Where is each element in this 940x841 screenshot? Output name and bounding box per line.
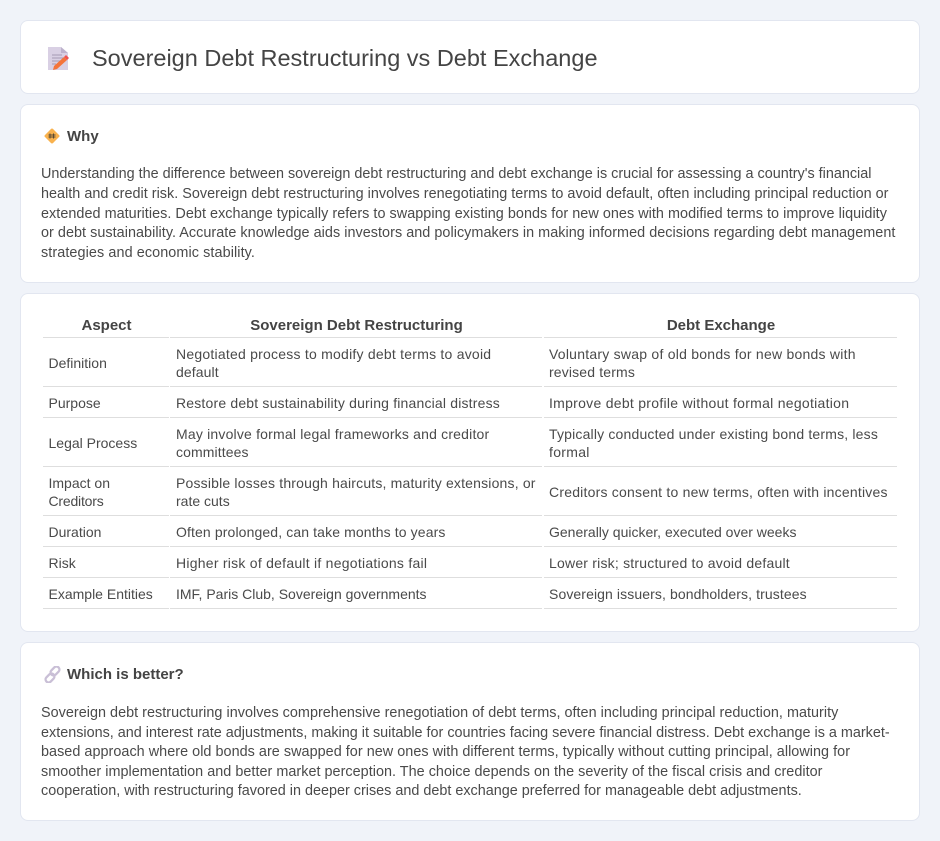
why paragraph: or debt sustainability. Accurate knowledge aids investors and policymakers in making informed decisions regarding debt management [41, 225, 895, 241]
row: legal process: Legal Process [48, 435, 137, 451]
which is better paragraph: extensions, and interest rate adjustments, making it suitable for countries facing severe financial distress. Debt exchange is a market- [41, 725, 890, 741]
why paragraph: health and credit risk. Sovereign debt restructuring involves renegotiating terms to avoid default, often including principal reduction or [41, 186, 888, 202]
icon: warning diamond [44, 128, 60, 144]
row: definition: Voluntary swap of old bonds for new bonds with [549, 346, 856, 362]
row: impact on creditors [48, 475, 888, 509]
row: definition: revised terms [549, 364, 635, 380]
why paragraph: Understanding the difference between sovereign debt restructuring and debt exchange is crucial for assessing a country's financial [41, 166, 871, 182]
row: legal process: formal [549, 444, 590, 460]
row: example entities: Example Entities [48, 586, 153, 602]
row: definition [48, 346, 856, 380]
panel: comparison table [20, 293, 920, 632]
row: impact on creditors: Creditors [48, 493, 104, 509]
table header [81, 317, 775, 334]
row: example entities: Sovereign issuers, bondholders, trustees [549, 586, 807, 602]
panel: title card [20, 20, 920, 94]
why paragraph: extended maturities. Debt exchange typically refers to swapping existing bonds for new ones with modified terms to improve liquidity [41, 206, 887, 222]
row: risk: Risk [48, 555, 76, 571]
row: purpose: Improve debt profile without formal negotiation [549, 395, 849, 411]
why paragraph [41, 166, 896, 261]
row: risk [48, 555, 790, 571]
panel: why [20, 104, 920, 283]
panel: which is better [20, 642, 920, 821]
table header: Aspect [81, 317, 132, 334]
table header: Debt Exchange [667, 317, 775, 334]
row: impact on creditors: rate cuts [176, 493, 230, 509]
table header: Sovereign Debt Restructuring [250, 317, 463, 334]
row: duration: Duration [48, 524, 101, 540]
title: Sovereign Debt Restructuring vs Debt Exchange [92, 45, 598, 71]
row: impact on creditors: Possible losses through haircuts, maturity extensions, or [176, 475, 536, 491]
row: definition: default [176, 364, 219, 380]
row: example entities: IMF, Paris Club, Sovereign governments [176, 586, 427, 602]
row: legal process: committees [176, 444, 249, 460]
row: impact on creditors: Creditors consent to new terms, often with incentives [549, 484, 888, 500]
heading: which is better: Which is better? [67, 666, 184, 683]
icon: document with pencil [48, 47, 69, 70]
which is better paragraph: cooperation, with restructuring favored in deeper crises and debt exchange preferred for manageable debt adjustments. [41, 783, 802, 799]
row: purpose: Purpose [48, 395, 101, 411]
row: purpose: Restore debt sustainability during financial distress [176, 395, 500, 411]
row: purpose [48, 395, 849, 411]
row: example entities [48, 586, 807, 602]
row: duration: Generally quicker, executed over weeks [549, 524, 796, 540]
row: definition: Negotiated process to modify debt terms to avoid [176, 346, 491, 362]
row: legal process [48, 426, 878, 460]
row: duration: Often prolonged, can take months to years [176, 524, 446, 540]
row: risk: Higher risk of default if negotiations fail [176, 555, 427, 571]
which is better paragraph [41, 705, 890, 799]
row: legal process: May involve formal legal frameworks and creditor [176, 426, 489, 442]
row: impact on creditors: Impact on [48, 475, 110, 491]
row: duration [48, 524, 796, 540]
which is better paragraph: Sovereign debt restructuring involves comprehensive renegotiation of debt terms, often including principal reduction, maturity [41, 705, 838, 721]
row: risk: Lower risk; structured to avoid default [549, 555, 790, 571]
heading: why: Why [67, 128, 99, 145]
row: legal process: Typically conducted under existing bond terms, less [549, 426, 878, 442]
row: definition: Definition [48, 355, 107, 371]
which is better paragraph: smoother implementation and better market perception. The choice depends on the severity of the fiscal crisis and creditor [41, 764, 822, 780]
which is better paragraph: based approach where old bonds are swapped for new ones with different terms, typically without cutting principal, allowing for [41, 744, 850, 760]
why paragraph: strategies and economic stability. [41, 245, 255, 261]
icon: link [44, 666, 60, 683]
